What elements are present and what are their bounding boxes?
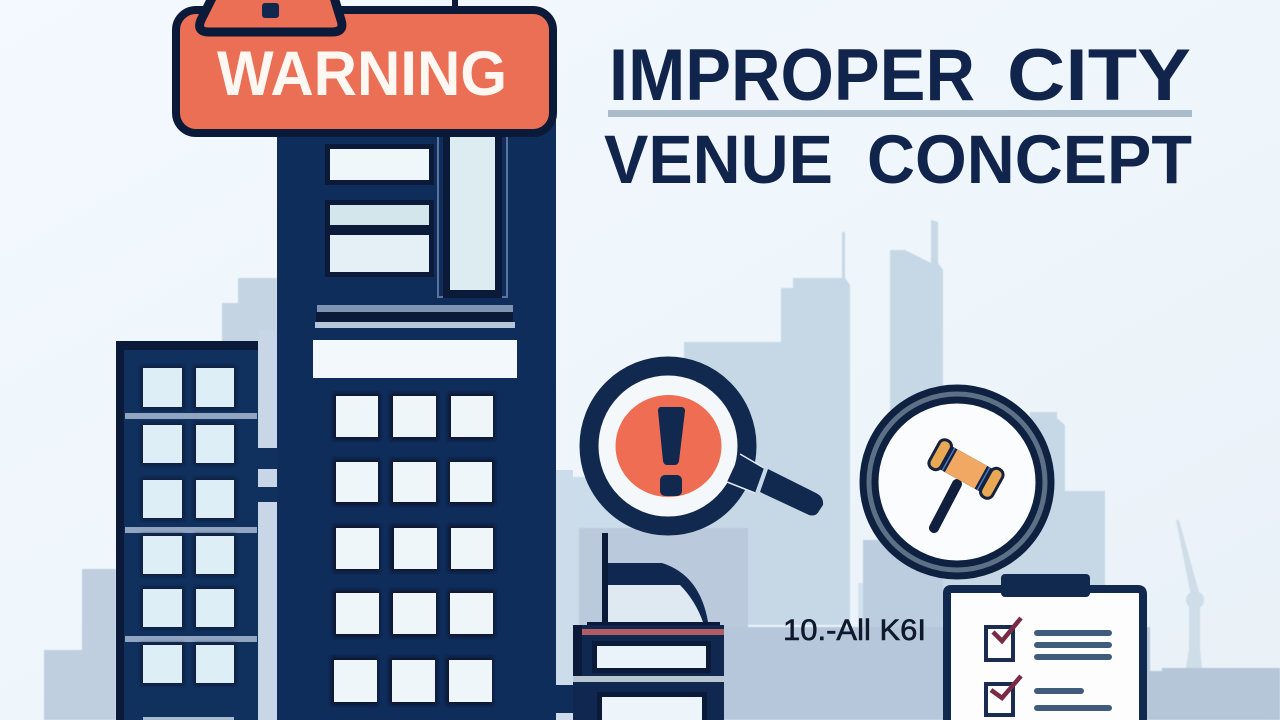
background skyline <box>44 220 1280 720</box>
left building <box>116 341 258 720</box>
left building floor bands <box>125 413 257 642</box>
venue band <box>582 629 724 635</box>
left building windows <box>143 368 234 720</box>
warning sign <box>176 0 553 133</box>
clipboard clip <box>1001 574 1090 597</box>
clipboard board <box>947 589 1143 720</box>
tower upper windows <box>325 144 434 277</box>
checklist row two <box>986 676 1112 715</box>
venue upper window <box>592 641 711 673</box>
title line one <box>609 35 1191 116</box>
gavel head <box>927 438 1005 500</box>
distant tower <box>1176 520 1204 668</box>
alert disc <box>616 395 722 497</box>
venue lower window <box>597 692 707 720</box>
tower ledge bands <box>313 305 517 378</box>
caption: 10.-All K6I <box>783 614 926 647</box>
tower window shadows <box>331 393 495 705</box>
magnifier handle <box>727 454 823 516</box>
sign panel <box>176 10 553 133</box>
sign label: WARNING <box>217 39 507 109</box>
title <box>604 35 1192 198</box>
warning triangle icon <box>200 0 342 32</box>
magnifier lens <box>589 366 747 526</box>
title line two <box>604 121 1192 198</box>
icon: magnifier with exclamation <box>589 366 823 526</box>
left building window shadows <box>141 366 236 685</box>
tower tall window <box>437 137 508 298</box>
small venue building <box>556 470 724 720</box>
title line two: CONCEPT <box>867 121 1192 198</box>
venue roof <box>587 533 720 626</box>
exclamation mark <box>658 407 685 496</box>
title line one: CITY <box>1007 35 1191 116</box>
checklist row one <box>986 618 1112 660</box>
icon: gavel in circle <box>869 394 1045 570</box>
title divider <box>608 110 1192 117</box>
title line two: VENUE <box>604 121 833 198</box>
main tower <box>277 120 556 720</box>
gavel handle <box>934 484 957 528</box>
venue body <box>573 625 724 720</box>
connector between left and main building <box>258 330 277 720</box>
tower window grid <box>334 396 493 702</box>
gavel ring <box>869 394 1045 570</box>
title line one: IMPROPER <box>609 35 975 116</box>
clipboard checklist <box>947 574 1143 720</box>
